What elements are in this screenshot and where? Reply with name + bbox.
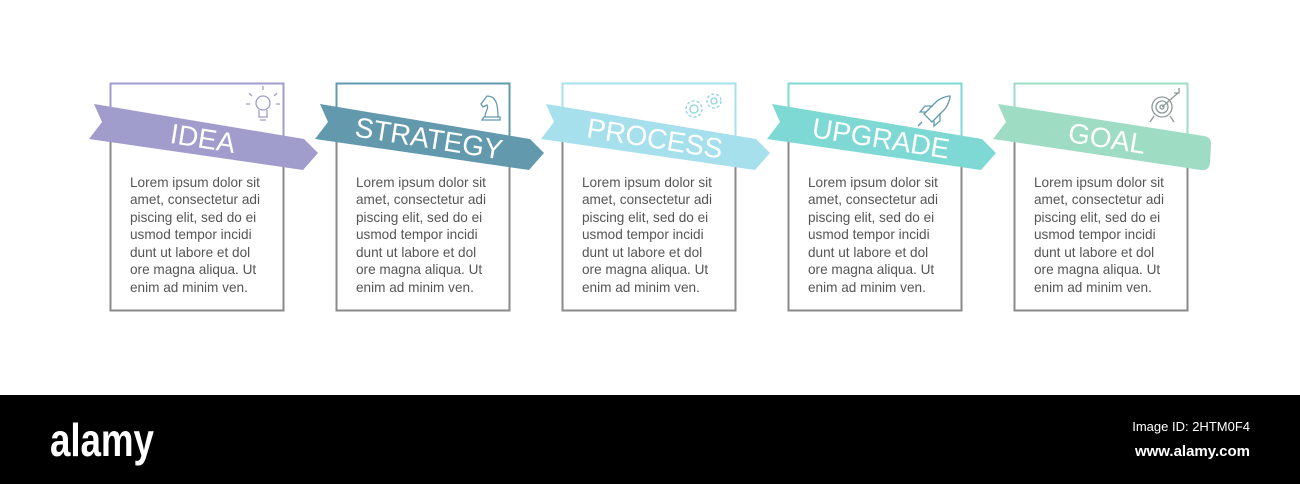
text block: goal: amet, consectetur adi xyxy=(1034,192,1164,207)
text block: upgrade: piscing elit, sed do ei xyxy=(808,210,934,225)
ribbon: process xyxy=(541,104,770,170)
text block: upgrade: dunt ut labore et dol xyxy=(808,245,928,260)
text block: goal: usmod tempor incidi xyxy=(1034,227,1156,242)
panel: goal xyxy=(993,84,1211,310)
text block: strategy: piscing elit, sed do ei xyxy=(356,210,482,225)
icon: target xyxy=(1150,88,1179,122)
footer bar xyxy=(0,395,1300,484)
panel: upgrade xyxy=(767,84,996,310)
text block: goal: enim ad minim ven. xyxy=(1034,280,1152,295)
panel: strategy xyxy=(315,84,544,310)
text block: goal: ore magna aliqua. Ut xyxy=(1034,262,1160,277)
text block: strategy: enim ad minim ven. xyxy=(356,280,474,295)
ribbon: goal xyxy=(993,104,1211,170)
footer url: www.alamy.com xyxy=(1134,443,1250,460)
text block: idea: usmod tempor incidi xyxy=(130,227,252,242)
text block: process: Lorem ipsum dolor sit xyxy=(582,175,712,190)
panel: idea xyxy=(89,84,318,310)
text block: idea: dunt ut labore et dol xyxy=(130,245,250,260)
text block: process: piscing elit, sed do ei xyxy=(582,210,708,225)
text block: strategy: amet, consectetur adi xyxy=(356,192,486,207)
text block: process: dunt ut labore et dol xyxy=(582,245,702,260)
ribbon: goal: GOAL xyxy=(1066,117,1148,160)
icon: rocket xyxy=(918,96,950,126)
footer image id: Image ID: 2HTM0F4 xyxy=(1132,419,1250,434)
text block: strategy: dunt ut labore et dol xyxy=(356,245,476,260)
text block: upgrade: ore magna aliqua. Ut xyxy=(808,262,934,277)
panel: process xyxy=(541,84,770,310)
text block: idea xyxy=(130,175,260,295)
icon: light bulb xyxy=(246,86,280,120)
text block: strategy: ore magna aliqua. Ut xyxy=(356,262,482,277)
ribbon: idea xyxy=(89,104,318,170)
ribbon: process: PROCESS xyxy=(585,112,725,165)
text block: process: usmod tempor incidi xyxy=(582,227,704,242)
ribbon: idea: IDEA xyxy=(168,118,238,159)
text block: goal xyxy=(1034,175,1164,295)
ribbon: strategy xyxy=(315,104,544,170)
text block: process: amet, consectetur adi xyxy=(582,192,712,207)
text block: idea: Lorem ipsum dolor sit xyxy=(130,175,260,190)
text block: strategy: usmod tempor incidi xyxy=(356,227,478,242)
text block: process xyxy=(582,175,712,295)
text block: upgrade: Lorem ipsum dolor sit xyxy=(808,175,938,190)
text block: idea: amet, consectetur adi xyxy=(130,192,260,207)
icon: gears xyxy=(686,94,721,117)
text block: goal: Lorem ipsum dolor sit xyxy=(1034,175,1164,190)
text block: upgrade: usmod tempor incidi xyxy=(808,227,930,242)
text block: strategy xyxy=(356,175,486,295)
footer logo: alamy xyxy=(50,414,154,466)
text block: upgrade xyxy=(808,175,938,295)
ribbon: strategy: STRATEGY xyxy=(353,112,505,165)
text block: process: ore magna aliqua. Ut xyxy=(582,262,708,277)
text block: goal: piscing elit, sed do ei xyxy=(1034,210,1160,225)
text block: upgrade: enim ad minim ven. xyxy=(808,280,926,295)
text block: idea: piscing elit, sed do ei xyxy=(130,210,256,225)
text block: idea: enim ad minim ven. xyxy=(130,280,248,295)
text block: upgrade: amet, consectetur adi xyxy=(808,192,938,207)
text block: idea: ore magna aliqua. Ut xyxy=(130,262,256,277)
text block: goal: dunt ut labore et dol xyxy=(1034,245,1154,260)
ribbon: upgrade xyxy=(767,104,996,170)
text block: strategy: Lorem ipsum dolor sit xyxy=(356,175,486,190)
icon: chess knight xyxy=(481,96,500,120)
ribbon: upgrade: UPGRADE xyxy=(810,112,952,165)
text block: process: enim ad minim ven. xyxy=(582,280,700,295)
